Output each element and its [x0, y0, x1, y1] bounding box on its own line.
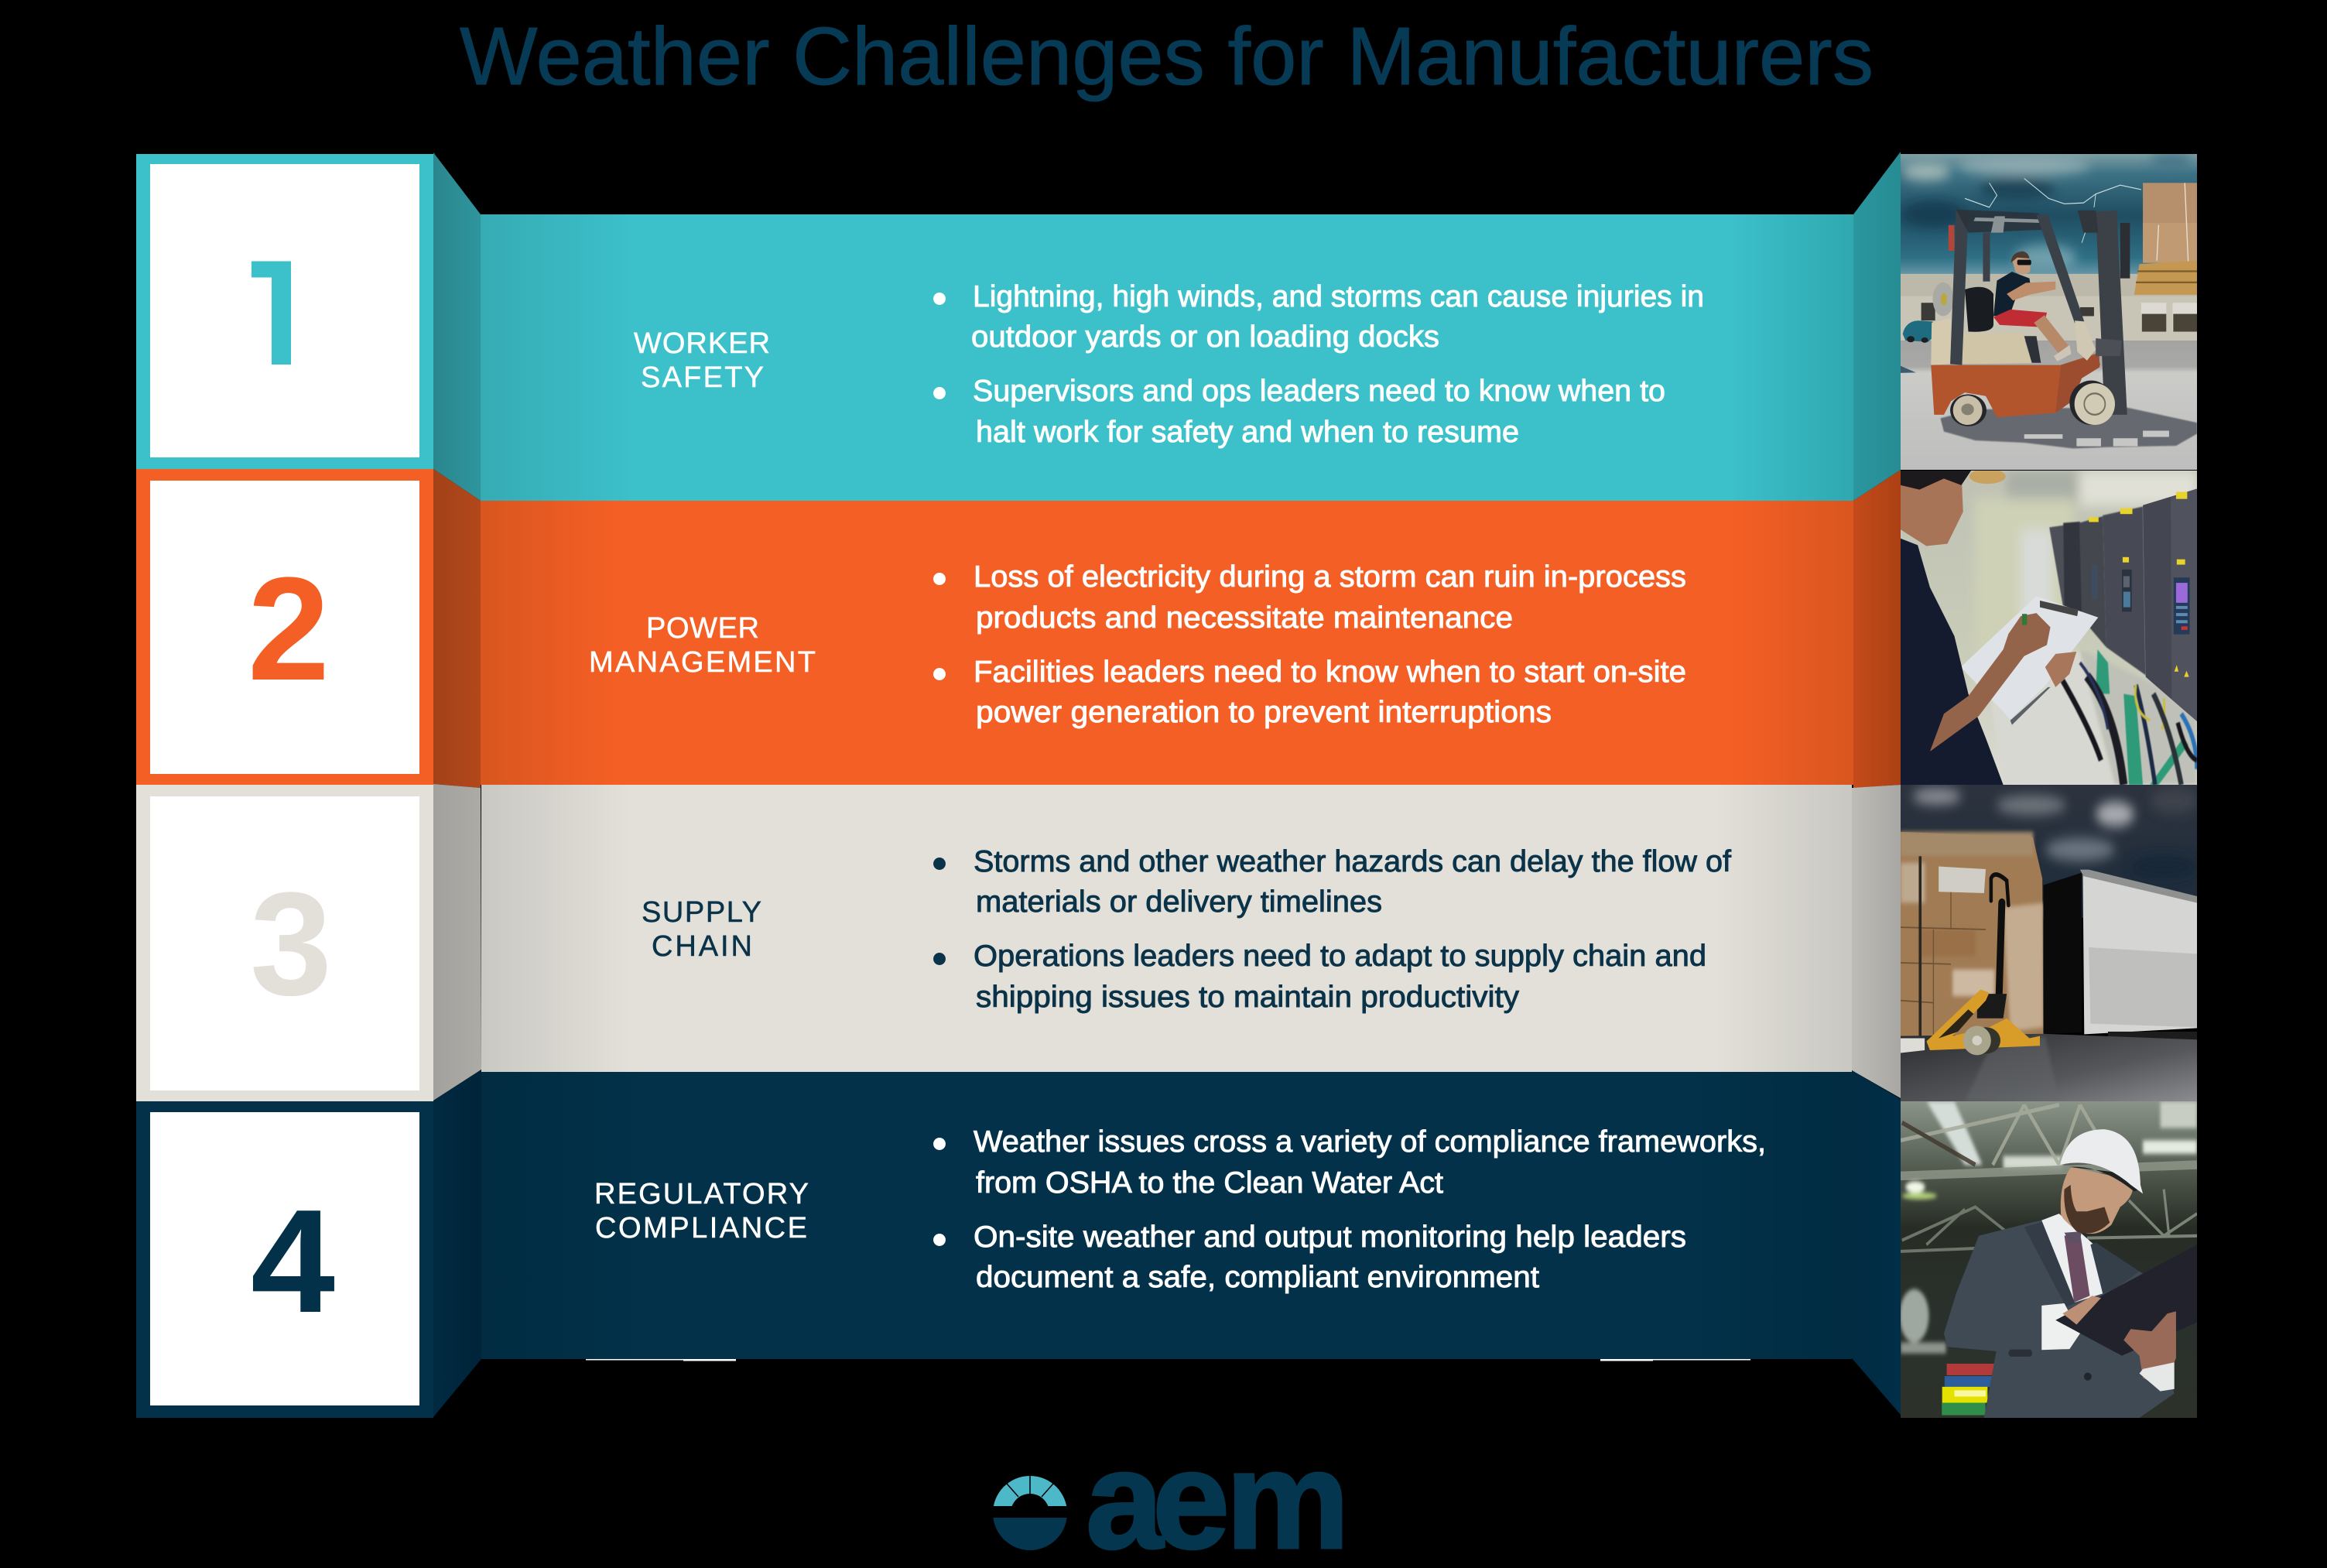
title: Weather Challenges for Manufacturers — [460, 11, 1874, 102]
bullets 1: Supervisors and ops leaders need to know when to — [973, 375, 1665, 408]
bullets 3 — [933, 845, 1731, 1014]
panel: 2 power management — [136, 469, 1901, 788]
panel: 3 supply chain — [136, 784, 1901, 1101]
photo: pallets and trailer under storm clouds — [1901, 785, 2197, 1101]
photo: forklift in storm — [1901, 154, 2197, 470]
right fold 2 — [1853, 470, 1901, 788]
number 3: 3 — [250, 862, 332, 1026]
right fold 1 — [1853, 152, 1901, 501]
bullets 4: from OSHA to the Clean Water Act — [976, 1166, 1443, 1200]
bullets 1: outdoor yards or on loading docks — [971, 320, 1439, 354]
bullets 2 — [933, 560, 1686, 729]
bullets 2: power generation to prevent interruptions — [976, 696, 1552, 729]
label: regulatory compliance: REGULATORY — [594, 1178, 809, 1210]
label: power management: POWER — [646, 612, 759, 645]
bullets 1: Lightning, high winds, and storms can cause injuries in — [973, 280, 1704, 313]
number box 4 — [136, 1101, 433, 1418]
number box 1 — [136, 154, 433, 469]
bullets 3: Operations leaders need to adapt to supply chain and — [974, 940, 1706, 973]
number box 3 — [136, 785, 433, 1101]
bullets 1 — [933, 280, 1704, 449]
panel: 1 worker safety — [136, 152, 1901, 501]
bullets 2: Loss of electricity during a storm can ruin in-process — [974, 560, 1686, 594]
bullets 4: Weather issues cross a variety of compliance frameworks, — [974, 1125, 1766, 1159]
label: power management: MANAGEMENT — [589, 646, 816, 679]
label: regulatory compliance — [594, 1178, 809, 1244]
label: worker safety: SAFETY — [641, 361, 764, 394]
left fold 2 — [433, 469, 481, 788]
label: supply chain — [642, 896, 761, 963]
band 2 — [481, 501, 1853, 785]
band 4 — [481, 1072, 1852, 1359]
left fold 4 — [433, 1070, 481, 1417]
number box 2 — [136, 469, 433, 785]
photo: engineer in hard hat with clipboard — [1901, 1101, 2197, 1418]
panel: 4 regulatory compliance — [136, 1070, 1901, 1418]
right fold 3 — [1852, 785, 1901, 1098]
number 4: 4 — [251, 1179, 335, 1344]
label: worker safety — [634, 327, 770, 394]
logo mark — [993, 1476, 1067, 1550]
number 2: 2 — [248, 547, 330, 711]
label: supply chain: CHAIN — [652, 930, 752, 963]
label: supply chain: SUPPLY — [642, 896, 761, 929]
left fold 3 — [433, 784, 481, 1101]
label: regulatory compliance: COMPLIANCE — [595, 1212, 807, 1244]
bullets 2: products and necessitate maintenance — [976, 601, 1513, 635]
logo: aem — [993, 1472, 1342, 1551]
band edge glints — [586, 1359, 1750, 1361]
bullets 4 — [933, 1125, 1766, 1294]
bullets 4: On-site weather and output monitoring help leaders — [974, 1221, 1686, 1254]
number 1: 1 — [231, 232, 313, 396]
photo: technician with clipboard at power cabinets — [1901, 471, 2197, 785]
band 1 — [481, 214, 1853, 501]
bullets 3: materials or delivery timelines — [976, 885, 1382, 919]
label: power management — [589, 612, 816, 679]
label: worker safety: WORKER — [634, 327, 770, 360]
bullets 3: Storms and other weather hazards can delay the flow of — [974, 845, 1731, 878]
bullets 4: document a safe, compliant environment — [976, 1261, 1539, 1294]
number 1 — [252, 262, 291, 365]
right fold 4 — [1852, 1070, 1901, 1415]
bullets 3: shipping issues to maintain productivity — [976, 981, 1520, 1014]
left fold 1 — [433, 152, 481, 501]
bullets 2: Facilities leaders need to know when to start on-site — [974, 656, 1686, 689]
bullets 1: halt work for safety and when to resume — [976, 416, 1519, 449]
band 3 — [481, 785, 1852, 1072]
